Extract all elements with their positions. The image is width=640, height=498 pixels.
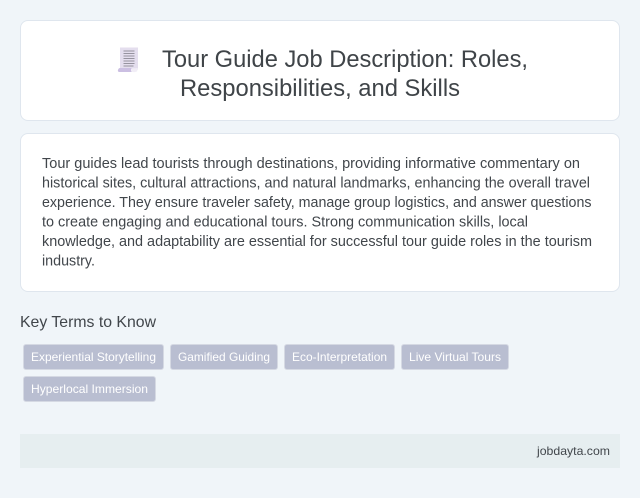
key term labels: Hyperlocal Immersion [31, 382, 148, 396]
key term labels: Experiential Storytelling [31, 350, 156, 364]
description text [42, 156, 592, 270]
panel: description card [20, 133, 620, 292]
description text: industry. [42, 254, 95, 270]
description text: knowledge, and adaptability are essential for successful tour guide roles in the tourism [42, 234, 592, 250]
title: Responsibilities, and Skills [180, 75, 460, 102]
key term chip: Experiential Storytelling [23, 344, 164, 370]
heading: Key Terms to Know: Key Terms to Know [20, 314, 156, 331]
description text: Tour guides lead tourists through destinations, providing informative commentary on [42, 156, 580, 172]
panel: footer bar [20, 434, 620, 468]
title: Tour Guide Job Description: Roles, [162, 46, 528, 73]
key term chip: Gamified Guiding [170, 344, 278, 370]
key term labels: Live Virtual Tours [409, 350, 501, 364]
key term chip: Hyperlocal Immersion [23, 376, 156, 402]
key term labels [31, 350, 501, 396]
key term chip: Live Virtual Tours [401, 344, 509, 370]
key term labels: Eco-Interpretation [292, 350, 387, 364]
footer credit: jobdayta.com [536, 444, 610, 458]
panel: title card [20, 20, 620, 121]
title [162, 46, 528, 102]
description text: experience. They ensure traveler safety, manage group logistics, and answer questions [42, 195, 592, 211]
key term chip: Eco-Interpretation [284, 344, 395, 370]
description text: to create engaging and educational tours. Strong communication skills, local [42, 214, 528, 230]
description text: historical sites, cultural attractions, and natural landmarks, enhancing the overall travel [42, 176, 590, 192]
icon: paper scroll [118, 48, 138, 72]
key term labels: Gamified Guiding [178, 350, 270, 364]
